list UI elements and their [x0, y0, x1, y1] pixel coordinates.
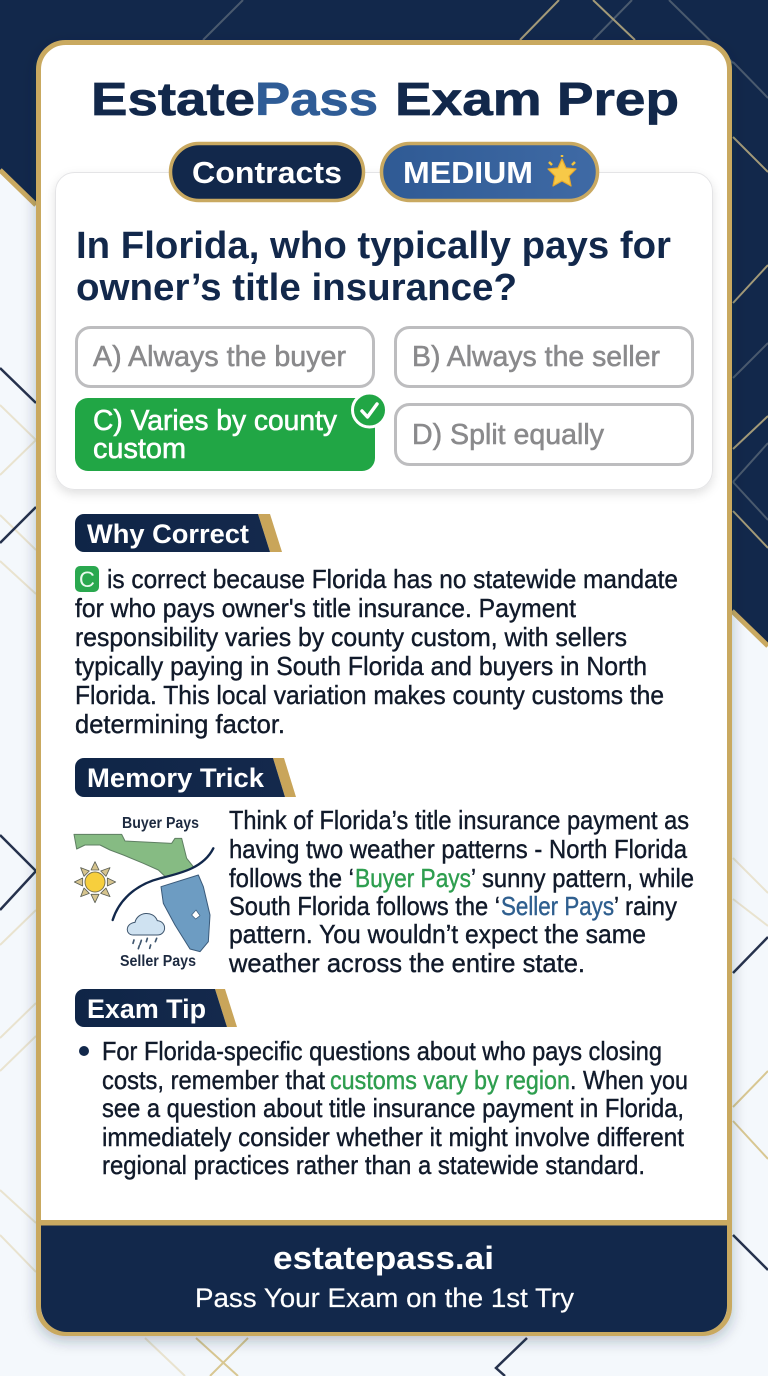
option C correct: C) Varies by county — [93, 405, 338, 437]
text: memory trick: Buyer Pays — [355, 863, 471, 893]
icon: rain cloud — [127, 913, 165, 949]
text: why correct: Florida. This local variation makes county customs the — [75, 680, 664, 710]
text: exam tip: regional practices rather than a statewide standard. — [102, 1150, 645, 1180]
option D: D) Split equally — [412, 419, 605, 451]
text: exam tip: customs vary by region — [330, 1065, 570, 1095]
text: memory trick: South Florida follows the ‘ — [229, 891, 500, 921]
question text — [76, 225, 671, 309]
badge: C: C — [79, 567, 95, 592]
text: why correct: is correct because Florida has no statewide mandate — [107, 564, 678, 594]
lake — [192, 910, 200, 919]
question panel — [56, 172, 712, 490]
badge: Contracts — [170, 144, 364, 200]
text: memory trick: Think of Florida’s title insurance payment as — [229, 805, 689, 835]
icon: sun — [74, 862, 116, 903]
icon: star — [548, 155, 576, 186]
text: memory trick: sunny pattern, while — [482, 863, 694, 893]
title: Exam Prep — [395, 73, 679, 125]
text: exam tip: see a question about title insurance payment in Florida, — [102, 1093, 684, 1123]
text: why correct: typically paying in South Florida and buyers in North — [75, 651, 647, 681]
text: exam tip — [79, 1036, 688, 1180]
text: exam tip: immediately consider whether it might involve different — [102, 1122, 685, 1152]
badge: Medium — [382, 144, 598, 200]
watermarks — [110, 1341, 569, 1376]
badge: Contracts: Contracts — [192, 155, 342, 190]
footer — [41, 1220, 727, 1332]
option D — [396, 404, 692, 464]
north Florida — [74, 834, 198, 876]
icon: check mark — [352, 393, 386, 427]
badge: C — [75, 566, 99, 592]
footer: Pass Your Exam on the 1st Try — [195, 1283, 575, 1313]
heading: Why Correct: Why Correct — [87, 519, 249, 549]
title — [91, 73, 679, 125]
text: exam tip: costs, remember that — [102, 1065, 326, 1095]
heading: Memory Trick: Memory Trick — [87, 763, 265, 793]
text: why correct: determining factor. — [75, 709, 285, 739]
text: memory trick — [228, 805, 694, 978]
title: Pass — [255, 73, 378, 125]
heading: Why Correct — [75, 514, 282, 552]
illustration: Florida map: Seller Pays — [120, 953, 196, 970]
text: memory trick: pattern. You wouldn’t expect the same — [229, 919, 646, 949]
text: why correct: for who pays owner's title insurance. Payment — [75, 593, 577, 623]
text: memory trick: having two weather patterns - North Florida — [229, 834, 687, 864]
question text: In Florida, who typically pays for — [76, 225, 671, 267]
text: memory trick: ’ — [614, 891, 619, 921]
text: memory trick: weather across the entire state. — [228, 948, 585, 978]
option B: B) Always the seller — [412, 341, 660, 373]
question text: owner’s title insurance? — [76, 267, 517, 309]
heading: Exam Tip — [75, 989, 237, 1027]
badge: Medium: MEDIUM — [403, 155, 533, 190]
text: why correct: responsibility varies by county custom, with sellers — [75, 622, 627, 652]
illustration: Florida map — [74, 815, 213, 970]
divider curve — [113, 848, 213, 920]
south Florida — [161, 875, 210, 952]
text: memory trick: Seller Pays — [501, 891, 614, 921]
footer: estatepass.ai — [273, 1240, 494, 1276]
option B — [396, 328, 692, 386]
option A — [76, 328, 374, 386]
title: Estate — [91, 73, 255, 125]
text: exam tip: . When you — [570, 1065, 688, 1095]
illustration: Florida map: Buyer Pays — [122, 815, 199, 832]
text: memory trick: follows the ‘ — [229, 863, 354, 893]
option C correct — [75, 393, 386, 471]
text: memory trick: ’ — [471, 863, 476, 893]
heading: Exam Tip: Exam Tip — [87, 994, 206, 1024]
heading: Memory Trick — [75, 758, 296, 797]
text: exam tip: For Florida-specific questions about who pays closing — [102, 1036, 662, 1066]
option A: A) Always the buyer — [93, 341, 347, 373]
text: why correct — [75, 564, 678, 739]
text: memory trick: rainy — [625, 891, 677, 921]
option C correct: custom — [93, 433, 186, 465]
